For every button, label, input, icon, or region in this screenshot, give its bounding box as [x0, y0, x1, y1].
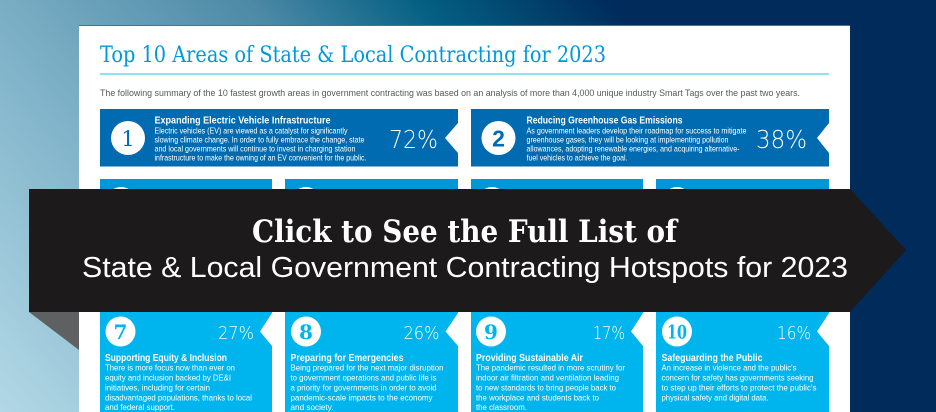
card 8 text: Being prepared for the next major disruption [290, 362, 444, 372]
stat: 26%: 26% [404, 323, 440, 344]
card 1 text: infrastructure to make the owning of an EV convenient for the public. [154, 152, 366, 162]
card 8 text: pandemic-scale impacts to the economy [290, 392, 433, 402]
card 8 text: Preparing for Emergencies [290, 353, 404, 364]
intro text: The following summary of the 10 fastest growth areas in government contracting was based on an analysis of more than 4,000 unique industry Smart Tags over the past two years. [100, 88, 800, 99]
card 7 text: There is more focus now than ever on [105, 362, 235, 372]
card 10: Safeguarding the Public [656, 305, 829, 412]
icon: number 1: 1 [121, 127, 135, 151]
card 7 text [105, 353, 252, 412]
icon: number 7: 7 [114, 320, 127, 344]
stat: 27%: 27% [218, 323, 254, 344]
icon: number 8 [291, 316, 321, 346]
row 2 cards (hidden behind banner) [100, 179, 829, 217]
icon: number 10 [662, 316, 692, 346]
card 2 text: As government leaders develop their roadmap for success to mitigate [526, 126, 747, 136]
card 7 text: equity and inclusion backed by DE&I [105, 372, 231, 382]
icon: number 2: 2 [492, 126, 505, 152]
icon: number 9: 9 [484, 320, 498, 344]
card 7 text: Supporting Equity & Inclusion [105, 353, 227, 364]
card 10 text: physical safety and digital data. [662, 392, 768, 402]
card 2: Reducing Greenhouse Gas Emissions [471, 109, 829, 166]
card 9: Providing Sustainable Air [471, 305, 643, 412]
card 1 text: and local governments will continue to invest in charging station [154, 144, 356, 154]
card 10 text: concern for safety has governments seeking [662, 372, 814, 382]
card 2 text: greenhouse gases, they will be looking at implementing pollution [526, 134, 729, 144]
card 10 text: to step up their efforts to protect the public's [662, 382, 817, 392]
card 7 text: initiatives, including for certain [105, 382, 210, 392]
icon: number 10: 10 [667, 322, 687, 344]
stat: 38%: 38% [756, 125, 807, 154]
card 1 text: Electric vehicles (EV) are viewed as a catalyst for significantly [154, 126, 348, 136]
card 8 text: a priority for governments in order to avoid [290, 382, 437, 392]
card 9 text: The pandemic resulted in more scrutiny for [476, 362, 625, 372]
icon: number 9 [476, 316, 506, 346]
card 7 text: disadvantaged populations, thanks to local [105, 392, 252, 402]
banner fold shadow [29, 312, 79, 350]
card 2 text: fuel vehicles to achieve the goal. [526, 152, 628, 162]
card 8 text: to government operations and public life is [290, 372, 437, 382]
banner heading: Click to See the Full List of [252, 214, 678, 250]
card 10 text: An increase in violence and the public's [662, 362, 797, 372]
card 7 text: and federal support. [105, 402, 175, 412]
card 9 text: indoor air filtration and ventilation leading [476, 372, 619, 382]
card 10 text: Safeguarding the Public [662, 353, 763, 364]
card 9 text [476, 353, 625, 412]
icon: number 8: 8 [299, 320, 313, 344]
banner subheading: State & Local Government Contracting Hotspots for 2023 [82, 252, 848, 284]
panel: report page [79, 25, 850, 412]
stat: 17%: 17% [593, 323, 625, 344]
card 9 text: Providing Sustainable Air [476, 353, 583, 364]
banner arrow [29, 189, 906, 312]
icon: number 7 [106, 316, 136, 346]
card 8: Preparing for Emergencies [285, 305, 458, 412]
icon: number 1 [111, 121, 145, 155]
card 1 text [154, 116, 366, 162]
card 2 text: allowances, adopting renewable energies, and acquiring alternative- [526, 144, 740, 154]
card 7: Supporting Equity & Inclusion [100, 305, 272, 412]
card 9 text: to new standards to bring people back to [476, 382, 616, 392]
card 1: Expanding Electric Vehicle Infrastructure [100, 109, 458, 166]
background right navy area [850, 0, 936, 412]
card 1 text: Expanding Electric Vehicle Infrastructure [154, 116, 331, 126]
icon: number 2 [482, 121, 516, 155]
card 9 text: the classroom. [476, 402, 527, 412]
card 8 text [290, 353, 444, 412]
stat: 72%: 72% [389, 125, 438, 154]
card 10 text [662, 353, 817, 402]
card 8 text: and society. [290, 402, 334, 412]
card 2 text [526, 116, 747, 162]
stat: 16%: 16% [777, 323, 811, 344]
card 1 text: slowing climate change. In order to fully embrace the change, state [154, 134, 365, 144]
card 2 text: Reducing Greenhouse Gas Emissions [526, 116, 683, 126]
card 9 text: the workplace and students back to [476, 392, 599, 402]
title: Top 10 Areas of State & Local Contracting for 2023 [100, 42, 606, 68]
